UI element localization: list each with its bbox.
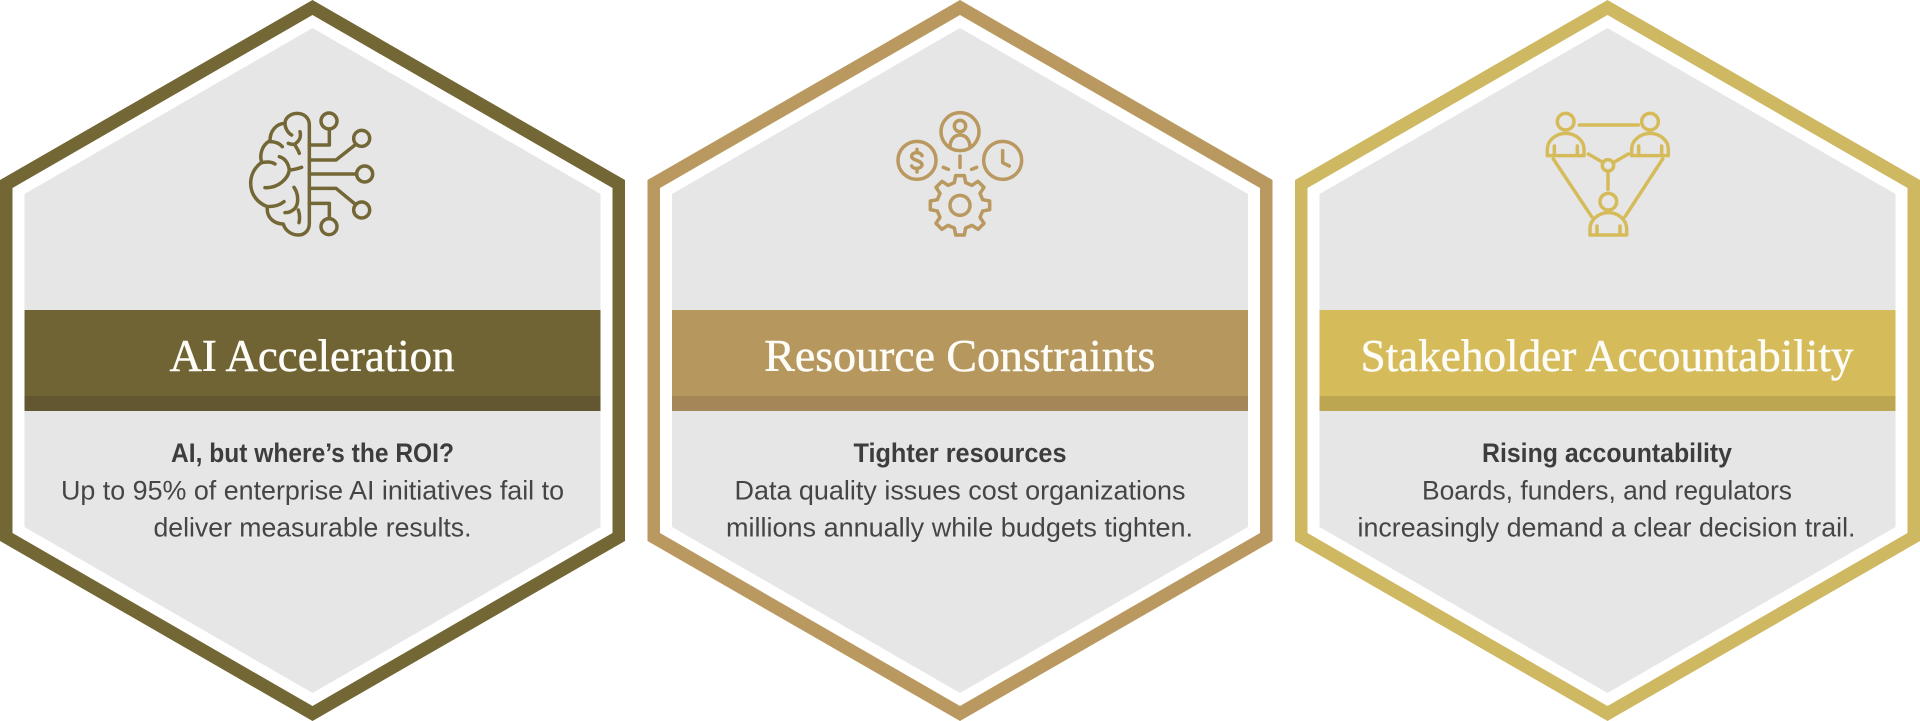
hexagon body: [1320, 28, 1896, 693]
hexagon body: [672, 28, 1248, 693]
subheading: Tighter resources: [854, 438, 1066, 468]
icon: connected stakeholders: [1547, 113, 1668, 235]
description: increasingly demand a clear decision trail.: [1358, 512, 1856, 542]
description: [1358, 476, 1856, 542]
description: millions annually while budgets tighten.: [726, 512, 1193, 542]
description: [61, 476, 564, 542]
description: deliver measurable results.: [154, 512, 472, 542]
heading band: [1320, 310, 1896, 411]
heading: AI Acceleration: [170, 331, 454, 381]
subheading: AI, but where’s the ROI?: [171, 438, 454, 468]
panel: Resource Constraints: [648, 0, 1272, 721]
hexagon border: [648, 0, 1272, 721]
panel: AI Acceleration: [0, 0, 625, 721]
hexagon border: [1295, 0, 1920, 721]
description: [726, 476, 1193, 542]
hexagon white gap: [1308, 15, 1908, 706]
heading: Stakeholder Accountability: [1360, 331, 1854, 381]
heading: Resource Constraints: [764, 331, 1155, 381]
icon: brain circuit: [251, 113, 373, 235]
heading band: [672, 310, 1248, 411]
description: Boards, funders, and regulators: [1422, 476, 1792, 506]
icon: resources and gear: [898, 113, 1022, 235]
hexagon white gap: [660, 15, 1260, 706]
hexagon border: [0, 0, 625, 721]
subheading: Rising accountability: [1482, 438, 1732, 468]
panel: Stakeholder Accountability: [1295, 0, 1920, 721]
heading band: [24, 310, 600, 411]
description: Up to 95% of enterprise AI initiatives fail to: [61, 476, 564, 506]
description: Data quality issues cost organizations: [734, 476, 1186, 506]
hexagon white gap: [12, 15, 612, 706]
hexagon body: [24, 28, 600, 693]
